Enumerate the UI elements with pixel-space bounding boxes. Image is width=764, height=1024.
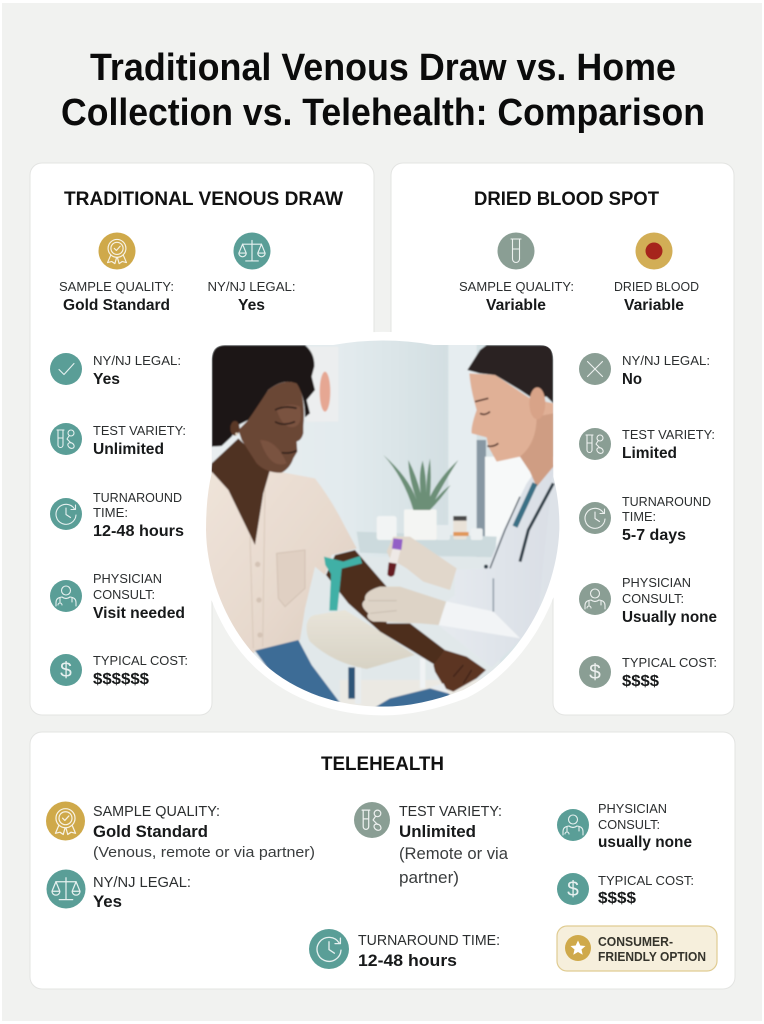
scrubs and stethoscope: [515, 483, 535, 527]
row: test variety: [50, 423, 186, 458]
row: typical cost: $$$$: [622, 673, 659, 690]
metric: legal: Yes: [238, 297, 265, 314]
row: legal: NY/NJ LEGAL:: [93, 353, 181, 368]
title: [61, 47, 705, 134]
blouse: [206, 470, 356, 654]
metric: physician consult: CONSULT:: [598, 817, 660, 832]
metric: sample quality: [46, 802, 315, 861]
metric: sample quality: [59, 232, 174, 314]
nurse jeans: [375, 688, 450, 707]
row: turnaround: TIME:: [622, 509, 656, 524]
metric: legal: [46, 870, 191, 911]
row: test variety: [579, 427, 715, 462]
row: typical cost: TYPICAL COST:: [622, 655, 717, 670]
row: legal: No: [622, 371, 642, 388]
metric: legal: [208, 232, 296, 314]
metric: typical cost: [557, 873, 694, 907]
metric: typical cost: $$$$: [598, 890, 636, 907]
row: turnaround: TIME:: [93, 505, 128, 520]
row: physician consult: CONSULT:: [93, 587, 155, 602]
metric: legal: Yes: [93, 892, 122, 911]
row: physician consult: Visit needed: [93, 605, 185, 622]
metric: sample quality: [459, 232, 574, 314]
row: turnaround: TURNAROUND: [93, 490, 182, 505]
row: turnaround: TURNAROUND: [622, 494, 711, 509]
metric: turnaround time: [309, 929, 500, 970]
metric: typical cost: TYPICAL COST:: [598, 873, 694, 888]
row: legal: [579, 353, 710, 388]
metric: sample quality: SAMPLE QUALITY:: [93, 804, 220, 820]
metric: physician consult: [557, 801, 692, 851]
test tube: [390, 548, 400, 564]
row: typical cost: [579, 655, 717, 690]
metric: sample quality: Variable: [486, 297, 546, 314]
metric: sample quality: Gold Standard: [63, 297, 170, 314]
metric: sample quality: (Venous, remote or via partner): [93, 844, 315, 861]
row: physician consult: CONSULT:: [622, 591, 684, 606]
row: legal: [50, 353, 181, 388]
metric: turnaround time: 12-48 hours: [358, 951, 457, 970]
row: physician consult: Usually none: [622, 609, 717, 626]
row: typical cost: TYPICAL COST:: [93, 653, 188, 668]
photo: nurse drawing blood from patient: [206, 332, 560, 716]
neck: [210, 438, 272, 547]
badge: consumer-friendly option: FRIENDLY OPTION: [598, 950, 706, 964]
metric: turnaround time: TURNAROUND TIME:: [358, 933, 500, 949]
metric: physician consult: usually none: [598, 834, 692, 851]
heading: telehealth: TELEHEALTH: [321, 753, 444, 775]
metric: legal: NY/NJ LEGAL:: [93, 875, 191, 891]
tourniquet: [324, 556, 362, 611]
row: test variety: Limited: [622, 445, 677, 462]
metric: legal: NY/NJ LEGAL:: [208, 279, 296, 294]
row: typical cost: $: [589, 661, 601, 684]
metric: typical cost: $: [567, 878, 579, 901]
panel: dried blood spot: [391, 163, 734, 715]
panel: traditional venous draw: [30, 163, 374, 715]
jeans: [255, 640, 342, 705]
metric: sample quality: SAMPLE QUALITY:: [459, 279, 574, 294]
metric: test variety: (Remote or via: [399, 844, 509, 863]
row: physician consult: [50, 571, 185, 622]
row: test variety: Unlimited: [93, 441, 164, 458]
heading: traditional venous draw: TRADITIONAL VENOUS DRAW: [64, 188, 344, 210]
metric: test variety: TEST VARIETY:: [399, 804, 502, 820]
metric: physician consult: PHYSICIAN: [598, 801, 667, 816]
title: Traditional Venous Draw vs. Home: [90, 47, 676, 89]
cushion: [307, 610, 415, 669]
metric: test variety: Unlimited: [399, 822, 476, 841]
row: turnaround: 5-7 days: [622, 527, 686, 544]
hair: [212, 345, 315, 447]
panel: telehealth: [30, 732, 735, 989]
face: [238, 382, 304, 473]
metric: dried blood: [614, 232, 699, 314]
metric: dried blood: DRIED BLOOD: [614, 279, 699, 294]
nurse face: [468, 372, 554, 462]
row: typical cost: $: [60, 659, 72, 682]
badge: consumer-friendly option: [557, 926, 717, 971]
row: test variety: TEST VARIETY:: [93, 423, 186, 438]
row: physician consult: PHYSICIAN: [622, 575, 691, 590]
row: physician consult: [579, 575, 717, 626]
metric: sample quality: Gold Standard: [93, 822, 208, 841]
row: turnaround: [50, 490, 184, 540]
row: legal: Yes: [93, 371, 120, 388]
row: legal: NY/NJ LEGAL:: [622, 353, 710, 368]
row: test variety: TEST VARIETY:: [622, 427, 715, 442]
row: typical cost: [50, 653, 188, 688]
arm: [326, 550, 445, 665]
row: turnaround: [579, 494, 711, 544]
gloves: [362, 587, 446, 625]
title: Collection vs. Telehealth: Comparison: [61, 92, 705, 134]
badge: consumer-friendly option: CONSUMER-: [598, 935, 673, 949]
coat: [492, 467, 560, 564]
metric: test variety: partner): [399, 868, 459, 887]
row: turnaround: 12-48 hours: [93, 523, 184, 540]
metric: sample quality: SAMPLE QUALITY:: [59, 279, 174, 294]
heading: dried blood spot: DRIED BLOOD SPOT: [474, 188, 659, 210]
metric: test variety: [354, 802, 509, 887]
row: physician consult: PHYSICIAN: [93, 571, 162, 586]
metric: dried blood: Variable: [624, 297, 684, 314]
row: typical cost: $$$$$$: [93, 671, 149, 688]
